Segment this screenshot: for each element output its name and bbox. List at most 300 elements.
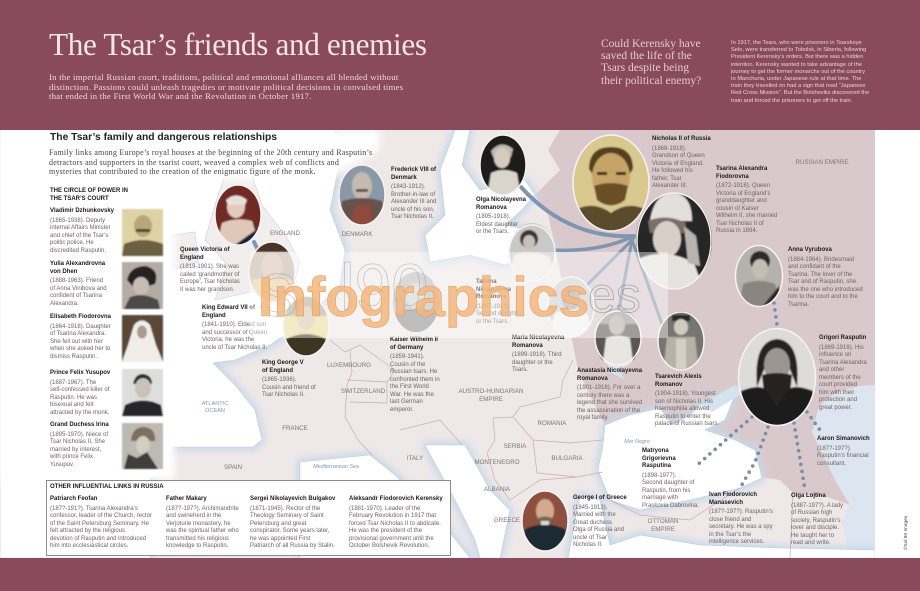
bio: Anna Vyrubova: and confidant of the [788,264,841,270]
bio: Frederick VIII: uncle of his son, [391,207,434,213]
intro text [49,72,403,101]
bio: Bulgakov [250,496,336,549]
bio: Simanovich [817,436,870,467]
bio: Von Dhen: von Dhen [50,268,77,274]
bio: Anna Vyrubova: Anna Vyrubova [788,247,832,253]
bio: Rasputin [819,334,867,411]
bio: Tatiana: Tatiana [476,279,497,285]
bio: Feofan [50,496,152,549]
bio: Olga Lojtina: lover and disciple. [791,525,839,531]
country labels: OTTOMAN [648,518,678,525]
bio: Yusupov: Prince Felix Yusupov [50,370,110,376]
bio: Nicholas II: Nicholas II of Russia [652,136,711,142]
bio: Irina: Tsar Nicholas II. She [50,439,105,445]
bio: Edward VII: and successor of Queen [202,330,267,336]
bio: Tatiana: Romanova [476,294,507,300]
bio: Queen Victoria: called ‘grandmother of [180,272,239,278]
bio: Feofan: (187?-191?). Tsarina Alexandra’s [50,506,138,512]
subheading: circle of power: THE CIRCLE OF POWER IN [50,188,128,194]
bio: Elisabeth: (1864-1918). Daughter [50,324,111,330]
portrait: Tatiana Nicolayevna [508,223,556,270]
Great Britain and Ireland [172,170,300,300]
bio: Simanovich: consultant. [817,461,846,467]
bio: Feofan: confessor, leader of the Church, rector [50,513,152,519]
sidebar question: Tsars despite being [601,62,689,74]
bio: Wilhelm II: the First World [390,384,429,390]
bio: Anna Vyrubova: him to the court and to the [788,294,858,300]
bio: George I: uncle of Tsar [573,535,607,541]
country labels: LUXEMBOURG [327,362,371,369]
bio: George I: George I of Greece [573,495,627,501]
bio: George I: (1845-1913). [573,505,607,511]
portrait: George I of Greece [522,490,568,552]
bio: Rasputin: him with their [819,390,854,396]
bio: Maria: (1899-1918). Third [512,352,562,358]
bio: Tatiana: or the Tsars. [476,319,509,325]
bio: George V: of England [262,368,293,374]
bio: Elisabeth: dismiss Rasputin. [50,354,97,360]
white panel behind intro [0,130,380,480]
Scandinavia lakes and Azov sea [608,365,740,412]
dotted links: Rasputin's circle [695,303,820,490]
bio: Rasputin: and other [819,367,844,373]
bio: Elisabeth: when she asked her to [50,346,110,352]
bio: Alexei: palace of Russian tsars. [655,421,719,427]
country labels: Mar Negro [624,439,650,445]
bio: Nicholas II: Victoria of England. [652,161,704,167]
bio: Olga Lojtina: of Russian high [791,510,832,516]
bio: Olga Nicolayevna: Romanova [476,204,507,210]
bio: Anastasia: royal family. [577,415,609,421]
bio: Anna Vyrubova: was the one who introduced [788,287,863,293]
portrait: Anna Vyrubova [734,244,784,308]
sidebar paragraph: Red Cross Mission”. But the Bolsheviks discovered the [731,90,869,96]
photo: Von Dhen [122,262,163,309]
bio: Elisabeth: of Tsarina Alexandra. [50,331,106,337]
bio: George I: Nicholas II. [573,542,603,548]
country labels: Mediterranean Sea [313,464,359,470]
bio: Anna Vyrubova: Tsarina. [788,302,809,308]
bio: Olga Lojtina [791,492,843,546]
bio: George V: (1865-1936). [262,377,296,383]
country labels: DENMARK [342,231,373,238]
bio: George I: Great duchess [573,520,612,526]
bio: Alexandra: Tsarina Alexandra [716,166,767,172]
bio: Yusupov: attracted by the monk. [50,410,109,416]
bio: Elisabeth: Elisabeth Fiodorovna [50,314,111,320]
bio: Alexei: son of Nicholas II. His [655,399,713,405]
sidebar question: their political enemy? [601,75,701,87]
bio: Wilhelm II: Kaiser Wilhelm II [390,337,438,343]
bio: Irina: with prince Felix [50,454,93,460]
bio: George I [573,494,627,548]
bio: Wilhelm II: confronted them in [390,377,440,383]
bio: George V: Cousin and friend of [262,385,316,391]
country labels: GREECE [494,517,520,524]
bio: Anastasia [577,368,642,421]
bio: Manasevich: Manasevich [709,500,743,506]
bio: Olga Lojtina: He taught her to [791,533,834,539]
portrait: Nicholas II [571,133,651,233]
header band [0,0,920,130]
bio: Makary [166,496,239,549]
bio: Nicholas II: (1868-1918). [652,146,686,152]
bio: George I: Married with the [573,512,616,518]
bio: Irina: Grand Duchess Irina [50,422,109,428]
bio: Edward VII: England [202,312,226,318]
bio: Anna Vyrubova: Tsar and of Rasputin, she [788,279,856,285]
sidebar question [601,38,701,87]
watermark: Infographics [258,266,589,328]
bio: Makary: knowledge to Rasputin. [166,543,228,549]
photo: Elisabeth Fiodorovna [122,315,163,362]
section description [49,148,372,176]
bio: Anna Vyrubova: (1884-1964). Bridesmaid [788,257,854,263]
bio: Von Dhen: confident of Tsarina [50,293,102,299]
bio: Bulgakov: Patriarch of all Russia by Stalin. [250,543,335,549]
bio: Alexandra [716,166,777,234]
bio: Queen Victoria [180,246,240,293]
bio: Wilhelm II: (1859-1941). [390,354,424,360]
bio: Matryona: (1898-1977). [642,473,676,479]
bio: Queen Victoria: II was her grandson. [180,287,234,293]
bio: Matryona: Grigorievna [642,456,676,462]
watermark: es [588,267,641,323]
bio: Anastasia: century there was a [577,393,629,399]
bio: Feofan: Patriarch Feofan [50,496,97,502]
bio: Frederick VIII: Frederick VIII of [391,167,436,173]
bio: Anastasia: legend that she survived [577,400,642,406]
bio: Frederick VIII: Alexander III and [391,199,436,205]
bio: Maria: daughter or the [512,360,553,366]
arrows: Nicholas and Alexandra to their children [254,187,662,324]
bio: Alexandra: Wilhelm II, she married [716,213,777,219]
bio: Irina: married by interest, [50,447,101,453]
bio: Makary: Father Makary [166,496,207,502]
bio: Irina: Yusupov. [50,462,74,468]
bio: Olga Lojtina: (1887-197?). A lady [791,503,843,509]
map of Europe [0,130,875,558]
bio: Von Dhen [50,260,107,307]
bio: Makary: (187?-197?). Archimandrite [166,506,239,512]
bio: Nicholas II: Grandson of Queen [652,153,705,159]
bio: Irina [50,422,109,468]
portrait: Queen Victoria [216,186,260,244]
sidebar paragraph: train and forced the prisoners to get off the train. [731,98,852,104]
bio: Matryona: Praskovia Dabrovina. [642,503,699,509]
bio: Yusupov: self-confessed killer of [50,387,109,393]
sidebar paragraph [730,40,869,104]
bio: Tatiana: (1897-1918). [476,304,510,310]
bio: Alexandra: Fiodorovna [716,174,749,180]
country labels: SPAIN [224,464,242,471]
bio: Edward VII: uncle of Tsar Nicholas II. [202,345,267,351]
bio: Rasputin: Tsarina Alexandra [819,360,867,366]
bio: Tatiana [476,278,522,325]
bio: Frederick VIII: Brother-in-law of [391,192,435,198]
photo: Dzhunkovsky [122,209,163,256]
bio: Dzhunkovsky: discredited Rasputin. [50,248,106,254]
bio: Edward VII: Victoria, he was the [202,337,254,343]
bio: Anna Vyrubova: Tsarina. The lover of the [788,272,852,278]
bio: Kerensky: He was the president of the [349,528,422,534]
portrait: Frederick VIII [337,163,387,227]
bio: Maria: Romanova [512,342,543,348]
bio: Queen Victoria: (1819-1901). She was [180,264,239,270]
bio: Edward VII: King Edward VII of [202,305,255,311]
bio: Rasputin: (1869-1916). His [819,345,864,351]
bio: Alexei: Rasputin to enter the [655,414,711,420]
bio: Manasevich: close friend and [709,517,751,523]
bio: Yusupov [50,370,110,416]
bio: Wilhelm II: War. He was the [390,392,434,398]
bio: George V: King George V [262,360,304,366]
bio: Bulgakov: Petersburg and great [250,521,306,527]
bio: Alexandra: Victoria of England’s [716,191,770,197]
bio: Von Dhen: Alexandra. [50,301,79,307]
bio: Nicholas II: Alexander III. [652,183,687,189]
bio: Bulgakov: conspirator. Some years later, [250,528,329,534]
bio: Tatiana: Second daughter [476,311,522,317]
country labels: ATLANTIC [202,401,228,407]
bio: George I: Olga of Russia and [573,527,624,533]
bio: Kerensky: October Bolshevik Revolution. [349,543,429,549]
subheading: circle of power: THE TSAR’S COURT [50,196,109,202]
country labels: EMPIRE [479,396,503,403]
bio: Edward VII: (1841-1910). Eldest son [202,322,266,328]
bio: Edward VII [202,304,267,351]
bio: Tatiana: Nicolayevna [476,286,511,292]
bio: Dzhunkovsky: politic police. He [50,240,94,246]
sidebar paragraph: intention. Kerensky wanted to take advantage of the [731,62,862,68]
bio: Wilhelm II: Cousin of the [390,362,425,368]
photo: Felix Yusupov [122,369,163,416]
bio: Dzhunkovsky: (1865-1938). Deputy [50,218,105,224]
title: The Tsar’s friends and enemies [49,27,427,62]
bio: Anastasia: (1901-1918). For over a [577,385,640,391]
bio: Alexei: Tsarevich Alexis [655,374,702,380]
sidebar paragraph: train they travelled on had a sign that read “Japanese [731,83,865,89]
watermark band [250,252,668,338]
bio: Manasevich: intelligence services. [709,539,764,545]
intro text: distinction. Passions could unleash tragedies or motivate political decisions in convulsed times [49,82,403,92]
bio: Anastasia: Anastasia Nicolayevna [577,368,642,374]
country labels: OCEAN [205,408,225,414]
bio: Maria [512,334,564,373]
bio: Nicholas II: father, Tsar [652,176,682,182]
bio: Olga Nicolayevna: Eldest daughter [476,222,518,228]
watermark: S [258,262,298,329]
bio: Olga Lojtina: Olga Lojtina [791,493,826,499]
section description: mysteries that contributed to the creation of the enigmatic figure of the monk. [49,167,316,176]
intro text: that ended in the First World War and the Revolution in October 1917. [49,91,312,101]
country labels: SWITZERLAND [341,388,386,395]
sidebar paragraph: to Manchuria, under Japanese rule at that time. The [731,76,861,82]
bio: Kerensky [349,496,443,549]
bio: Irina: (1895-1970). Niece of [50,432,108,438]
bio: Makary: transmitted his religious [166,536,229,542]
bio: Simanovich: Aaron Simanovich [817,436,870,442]
country labels: BULGARIA [551,455,584,462]
country labels [202,159,848,533]
bio: Matryona: Rasputin, from his [642,488,690,494]
country labels: EMPIRE [651,526,675,533]
bio: Rasputin: great power. [819,405,852,411]
bio: Wilhelm II [390,336,440,413]
footer band [0,558,920,591]
sidebar paragraph: Selo, were transferred to Tobolsk, in Siberia, following [731,47,866,53]
bio: Dzhunkovsky: and chief of the Tsar’s [50,233,108,239]
bio: Rasputin: court provided [819,382,857,388]
bio: Manasevich: in the Tsar’s the [709,532,751,538]
portrait: Olga Nicolayevna [480,134,526,196]
country labels: RUSSIAN EMPIRE [796,159,848,166]
bio: Manasevich: secretary. He was a spy [709,524,773,530]
bio: Alexei: (1904-1918). Youngest [655,391,716,397]
bio: Yusupov: (1887-1967). The [50,380,96,386]
bio: Simanovich: Rasputin’s financial [817,453,869,459]
bio: Olga Nicolayevna [476,196,526,235]
intro text: In the imperial Russian court, traditions, political and emotional alliances all blended without [49,72,399,82]
section heading: The Tsar’s family and dangerous relationships [50,132,277,143]
bio: Elisabeth: She fell out with her [50,339,103,345]
bio: Rasputin: protection and [819,397,857,403]
country labels: AUSTRO-HUNGARIAN [459,388,523,395]
bio: Anastasia: Romanova [577,376,608,382]
bio: Simanovich: (187?-197?). [817,446,851,452]
bio: Feofan: him into ecclesiastical circles. [50,543,128,549]
sidebar question: saved the life of the [601,50,692,62]
bio: Frederick VIII: Denmark [391,174,417,180]
bio: Alexei: haemophilia allowed [655,406,709,412]
bio: Nicholas II: He followed his [652,168,693,174]
panel: other influential links [46,480,451,556]
panel heading: OTHER INFLUENTIAL LINKS IN RUSSIA [50,484,164,490]
section description: detractors and supporters in the tsarist court, weaved a complex web of conflicts and [49,158,339,167]
bio: Queen Victoria: England [180,254,204,260]
bio: Frederick VIII: Tsar Nicholas II. [391,214,434,220]
country labels: FRANCE [282,425,308,432]
bio: Wilhelm II: of Germany [390,344,423,350]
country labels: MONTENEGRO [474,459,520,466]
bio: Nicholas II [652,136,711,189]
bio: Olga Lojtina: society, Rasputin’s [791,518,840,524]
bio: Feofan: of the Saint Petersburg Seminary. He [50,521,149,527]
bio: Kerensky: (1881-1970). Leader of the [349,506,420,512]
bio: George V [262,360,316,398]
portrait: Anastasia Nicolayevna [593,306,643,370]
bio: Bulgakov: Theology Seminary of Saint [250,513,324,519]
credit: ©Sol 90 Images [902,515,909,550]
photo: Grand Duchess Irina [122,423,163,469]
bio: Makary: was the spiritual father who [166,528,239,534]
bio: Alexandra: (1872-1918). Queen [716,183,770,189]
bio: Matryona: Matryona [642,448,669,454]
bio: Anna Vyrubova [788,246,863,308]
bio: Dzhunkovsky: internal Affairs Minister [50,225,111,231]
subheading: circle of power [50,188,128,202]
bio: Frederick VIII [391,166,436,220]
portrait: Tsarevich Alexei [656,309,706,373]
Caspian Sea [812,385,875,555]
bio: Matryona: Second daughter of [642,480,694,486]
bio: Alexei: Romanov [655,382,682,388]
bio: Dzhunkovsky: Vladimir Dzhunkovsky [50,208,114,214]
sidebar paragraph: journey to get the former monarchs out of the country [731,69,865,75]
bio: Makary: and swineherd in the [166,513,221,519]
portrait: King George V [284,296,328,356]
bio: Makary: Verjoturie monastery, he [166,521,231,527]
bio: Von Dhen: of Anna Vinibova and [50,286,107,292]
portrait: Maria Nicolayevna [549,276,595,338]
bio: Kerensky: Aleksandr Fiodorovich Kerensky [349,496,443,502]
bio: Alexandra: Russia in 1894. [716,228,757,234]
bio: Manasevich [709,492,773,545]
bio: Feofan: devotion of Rasputin and introduced [50,536,146,542]
bio: Von Dhen: (1888-1963). Friend [50,278,103,284]
bio: Kerensky: forced Tsar Nicholas II to abdicate. [349,521,441,527]
country labels: ITALY [407,455,423,462]
bio: Bulgakov: (1871-1945). Rector of the [250,506,320,512]
country labels: ROMANIA [538,420,567,427]
bio: Rasputin: members of the [819,375,861,381]
country labels: ENGLAND [270,230,300,237]
bio: Maria: Tsars. [512,367,528,373]
bio: Frederick VIII: (1843-1912). [391,184,425,190]
bio: Manasevich: Ivan Fiodorovich [709,492,757,498]
bio: Matryona: Rasputina [642,463,671,469]
bio: Olga Nicolayevna: Olga Nicolayevna [476,197,526,203]
bio: Yusupov: Rasputin. He was [50,395,97,401]
bio: Kerensky: February Revolution in 1917 that [349,513,436,519]
bio: Matryona: marriage with [642,495,678,501]
bio: Rasputin: Grigori Rasputin [819,335,866,341]
section description: Family links among Europe’s royal houses at the beginning of the 20th century and Rasputin’s [49,148,372,157]
sidebar paragraph: President Kerensky’s orders. But there was a hidden [731,54,863,60]
bio: Alexei [655,374,719,427]
left column photographs [122,209,163,469]
portrait: Tsarina Alexandra [634,191,714,291]
bio: Dzhunkovsky [50,208,114,254]
bio: Yusupov: bisexual and felt [50,402,93,408]
bio: Anastasia: the assassination of the [577,408,640,414]
country labels: SERBIA [504,443,527,450]
bio: Feofan: felt attracted by the religious [50,528,125,534]
country labels: ALBANIA [484,486,511,493]
bio: Elisabeth [50,314,111,360]
bio: Wilhelm II: Russian tsars. He [390,369,437,375]
bio: Alexandra: cousin of Kaiser [716,206,759,212]
bio: George V: Tsar Nicholas II. [262,392,305,398]
bio: Olga Lojtina: read and write. [791,540,831,546]
bio: Alexandra: Tsar Nicholas II of [716,221,764,227]
bio: Queen Victoria: Queen Victoria of [180,247,230,253]
sidebar question: Could Kerensky have [601,38,701,50]
bio: Olga Nicolayevna: (1895-1918). [476,214,510,220]
bio: Wilhelm II: emperor. [390,407,414,413]
bio: Matryona [642,448,699,509]
portrait: Grigori Rasputin [737,327,817,427]
bio: Manasevich: (187?-197?). Rasputin’s [709,509,773,515]
sidebar paragraph: In 1917, the Tsars, who were prisoners in Tsarskoye [731,40,862,46]
national borders [330,340,793,558]
portrait: King Edward VII [250,242,296,302]
bio: Queen Victoria: Europe’. Tsar Nicholas [180,279,240,285]
bio: Rasputin: influence on [819,352,851,358]
bio: Alexandra: granddaughter and [716,198,767,204]
bio: Maria: Maria Nicolayevna [512,335,564,341]
bio: Bulgakov: Sergei Nikolayevich Bulgakov [250,496,335,502]
